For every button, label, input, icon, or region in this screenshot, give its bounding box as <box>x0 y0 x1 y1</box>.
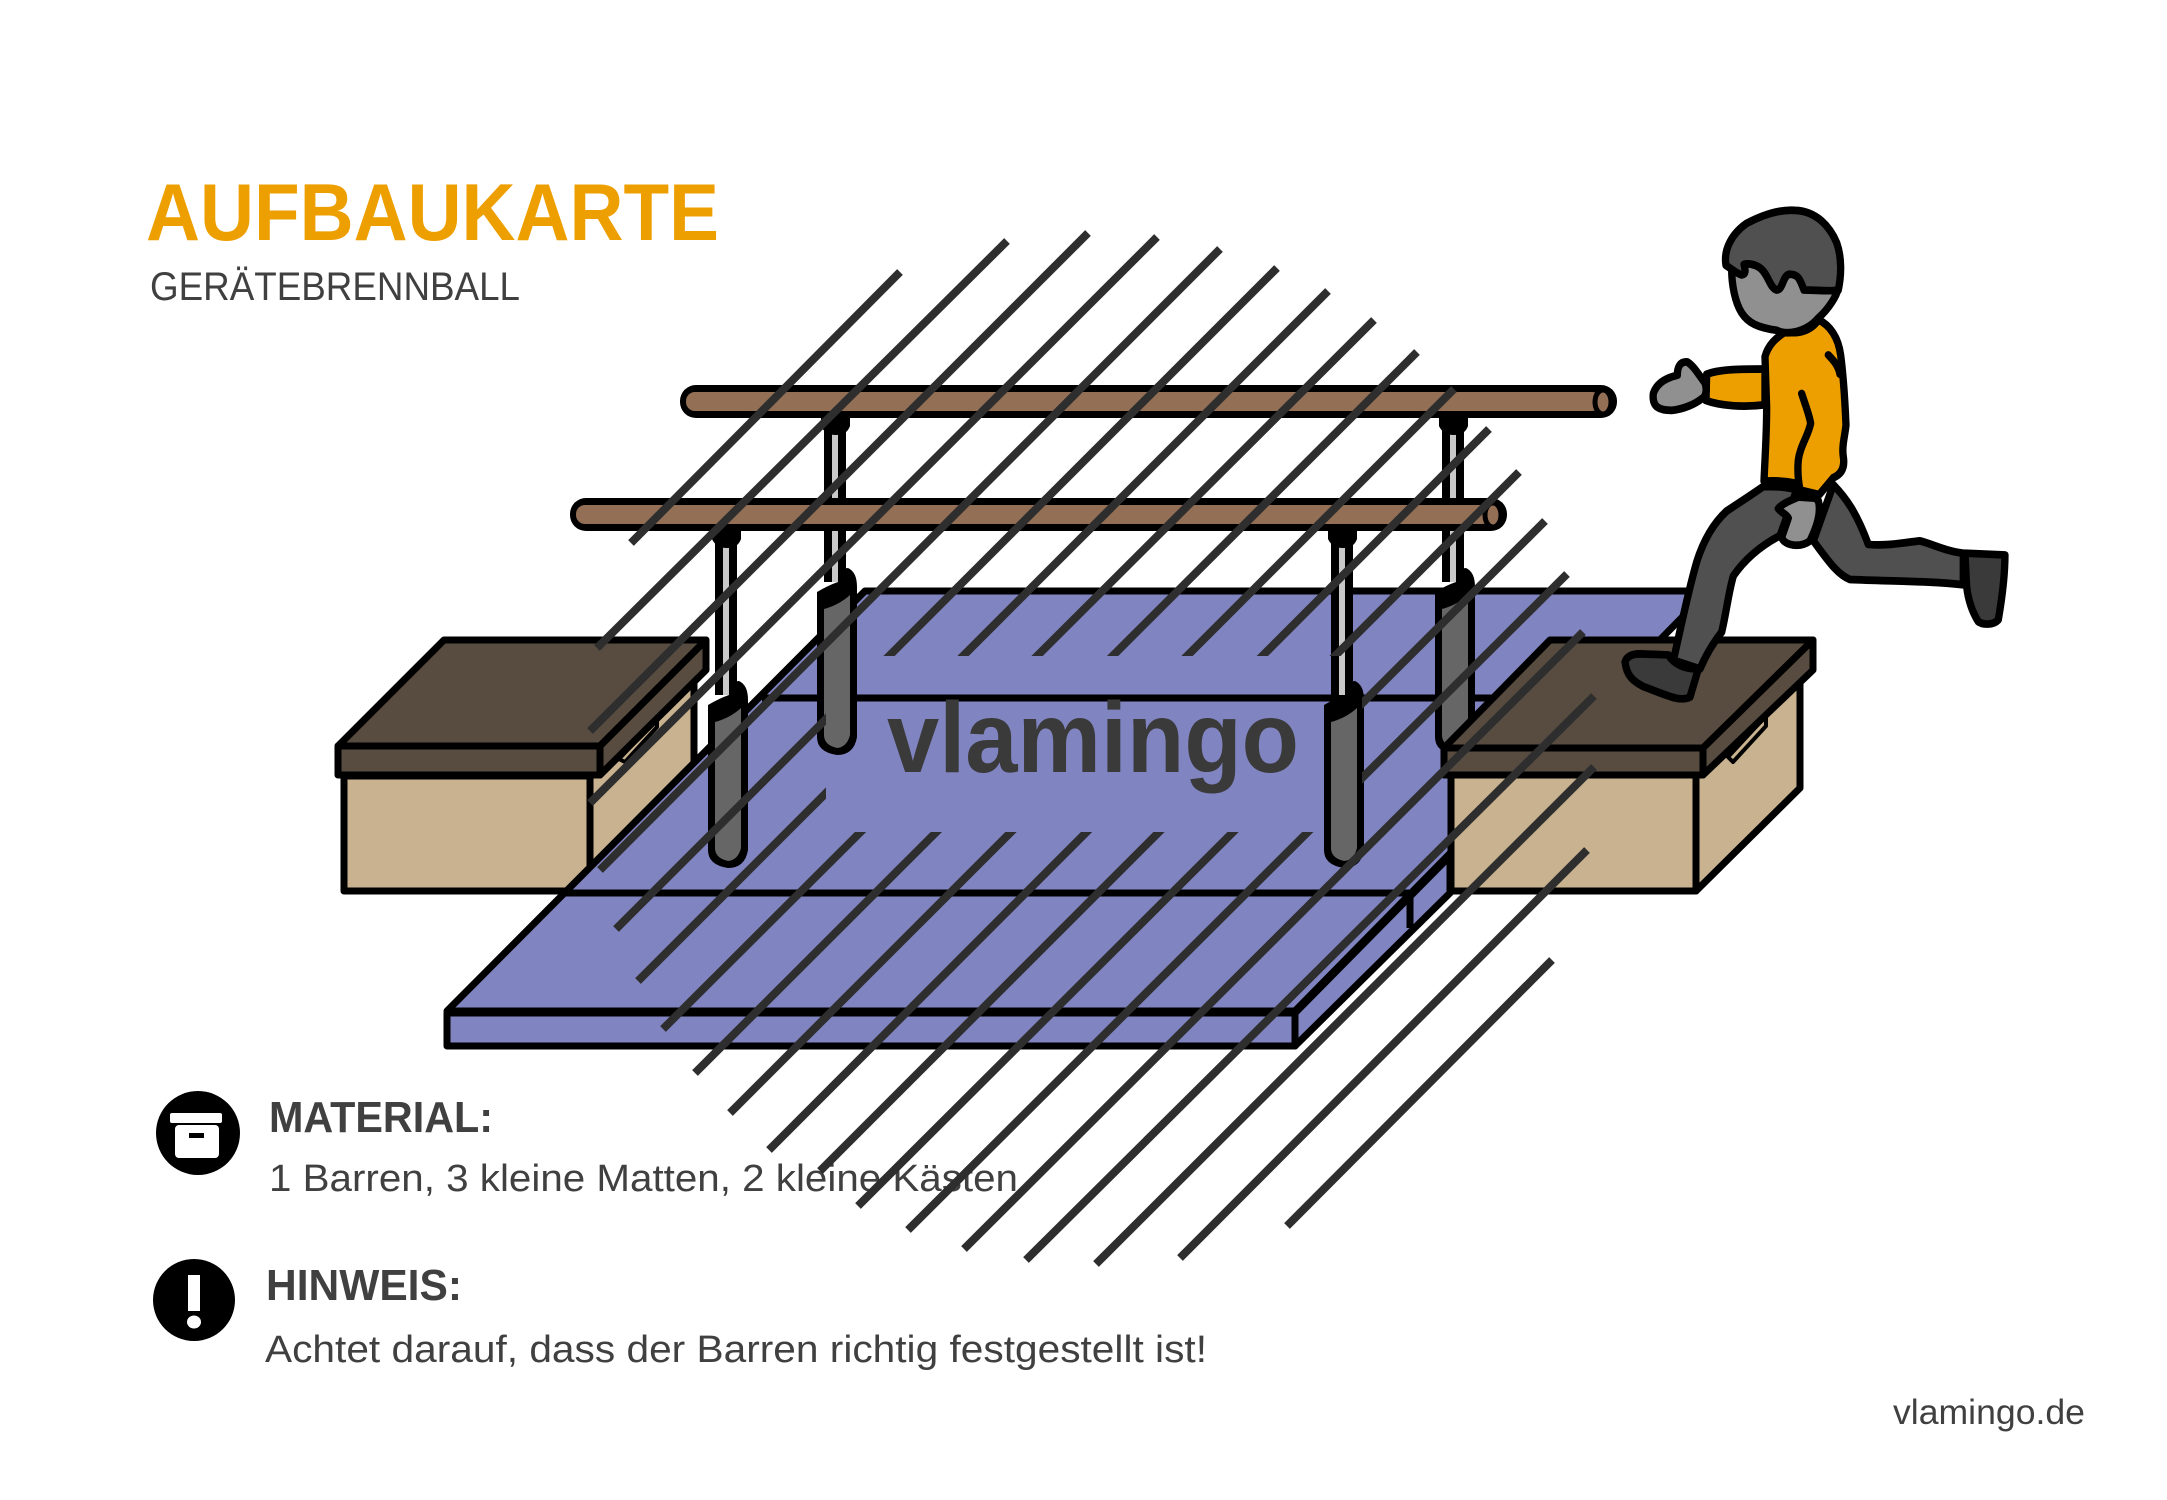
barren post: back right <box>1435 418 1475 755</box>
icon: warning <box>153 1259 235 1341</box>
barren post: front left <box>708 531 748 868</box>
front rail <box>570 498 1507 531</box>
hint text: Achtet darauf, dass der Barren richtig festgestellt ist! <box>265 1329 1207 1371</box>
hint heading: HINWEIS: <box>266 1261 462 1310</box>
subtitle: GERÄTEBRENNBALL <box>150 265 520 309</box>
barren post: back left <box>817 418 857 755</box>
barren post: front right <box>1324 531 1364 868</box>
right box <box>1444 640 1813 891</box>
material list: 1 Barren, 3 kleine Matten, 2 kleine Kästen <box>269 1158 1018 1200</box>
material heading: MATERIAL: <box>269 1093 493 1142</box>
back rail <box>680 385 1617 418</box>
running person <box>1625 210 2005 699</box>
logo on mat: vlamingo <box>887 682 1299 794</box>
left box <box>338 640 706 891</box>
icon: material box <box>156 1091 240 1175</box>
website credit: vlamingo.de <box>1893 1393 2085 1432</box>
title: AUFBAUKARTE <box>146 168 719 258</box>
infographic canvas <box>148 184 2084 1432</box>
gym mats <box>447 591 1708 1046</box>
diagonal hatch overlay <box>590 233 1594 1264</box>
